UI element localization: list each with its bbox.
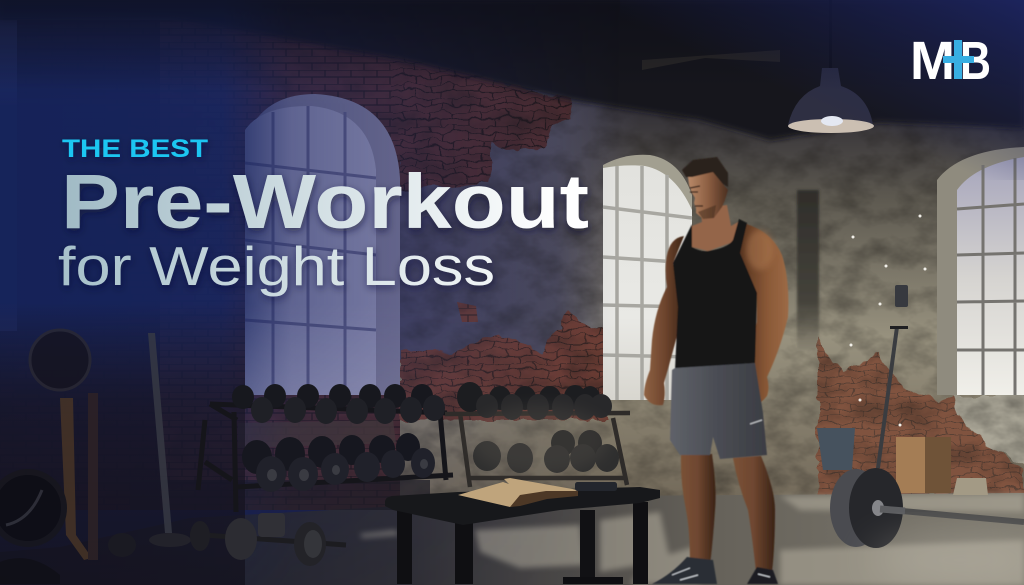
bench [385,487,660,584]
wall shadow under rack [130,480,430,510]
left window glass [245,106,376,395]
right wall plaster under window [953,396,1024,468]
bench foot [563,577,623,584]
purple plaster wall [400,90,640,360]
small crate [953,478,988,495]
lamp shade [788,68,873,125]
shoe laces [672,568,770,580]
left gym equipment [0,330,191,584]
stacked rubber plates [0,472,64,544]
barbell stand head [895,285,908,307]
shoes [652,557,717,584]
top darkening [0,0,1024,90]
metal bucket [817,428,855,470]
left rack bottom row dumbbells [242,433,435,492]
floor kettlebell [108,533,136,557]
barbell front plate [849,468,903,548]
tank top [673,219,757,370]
lower brick wall [400,310,608,420]
middle window glass [603,165,692,400]
bench legs [397,510,412,584]
right wall lower bricks [818,337,1024,495]
logo M: M [910,31,955,91]
dumbbell racks [198,382,630,512]
dumbbell plates [190,521,210,551]
floor mist [870,536,1024,584]
dust specks [850,214,926,426]
man standing [644,157,788,584]
wooden stand [60,398,92,560]
right window glass [957,157,1024,395]
lamp rim [788,119,874,133]
wall column [797,190,819,350]
lamp bulb glow [821,116,843,126]
facial features [690,186,703,206]
front leg [681,454,716,565]
lamp cord [829,0,832,70]
left edge window strip [0,20,17,331]
floor dumbbell [190,513,346,566]
left rack top row dumbbells [232,384,445,424]
floor [0,493,1024,585]
neck and chest [692,205,738,251]
barbell rear plate [830,469,882,547]
eyebrow: the best: THE BEST [62,135,208,163]
cardboard box [896,437,951,493]
left window [245,94,400,395]
open book [458,478,578,507]
main title: Pre-Workout [61,159,589,245]
ceiling panel [642,50,780,70]
middle window [603,155,692,400]
top right navy glow [620,0,1024,180]
dumbbell bar [190,534,346,545]
subtitle: for Weight Loss [58,235,495,297]
right arm [737,222,788,406]
barbell bar [880,509,1024,522]
brand logo [910,31,991,91]
middle window arch [603,155,692,400]
barbell and right props [817,285,1024,548]
dust haze over right rack [470,405,610,475]
sunlight on floor [360,494,1024,585]
left arm [644,236,684,405]
pole base [149,533,191,547]
bench seat [385,487,660,525]
left rack frame [198,404,453,512]
right window arch [937,147,1024,395]
weight plate on wall [30,330,90,390]
stubble shadow [698,205,716,219]
barbell stand pole [876,327,899,468]
book pages [458,478,578,507]
pole [148,333,172,533]
remote on bench [575,482,617,491]
shoulder highlight [746,230,774,270]
logo B: B [960,31,991,91]
left window arch surround [245,94,400,395]
right window [937,147,1024,395]
logo plus [943,40,974,79]
back leg [733,456,775,572]
small brick patch [457,302,478,322]
right rack frame [445,413,630,487]
book spine shadow [510,491,578,507]
hair [682,157,728,187]
upper exposed brick [390,50,572,190]
dark left brick wall [0,20,400,510]
face [688,172,728,219]
ceiling [0,0,1024,140]
right rack bottom row dumbbells [473,430,619,473]
right rack top row dumbbells [457,382,612,420]
barbell hub [872,500,884,516]
shorts logo [750,420,762,424]
title block [58,135,589,297]
lower left darkening [0,300,245,585]
pendant lamp [788,0,874,133]
left navy overlay [0,0,539,585]
floor weight block [258,513,285,537]
shorts [670,363,767,459]
wood backboard behind rack [238,420,396,448]
